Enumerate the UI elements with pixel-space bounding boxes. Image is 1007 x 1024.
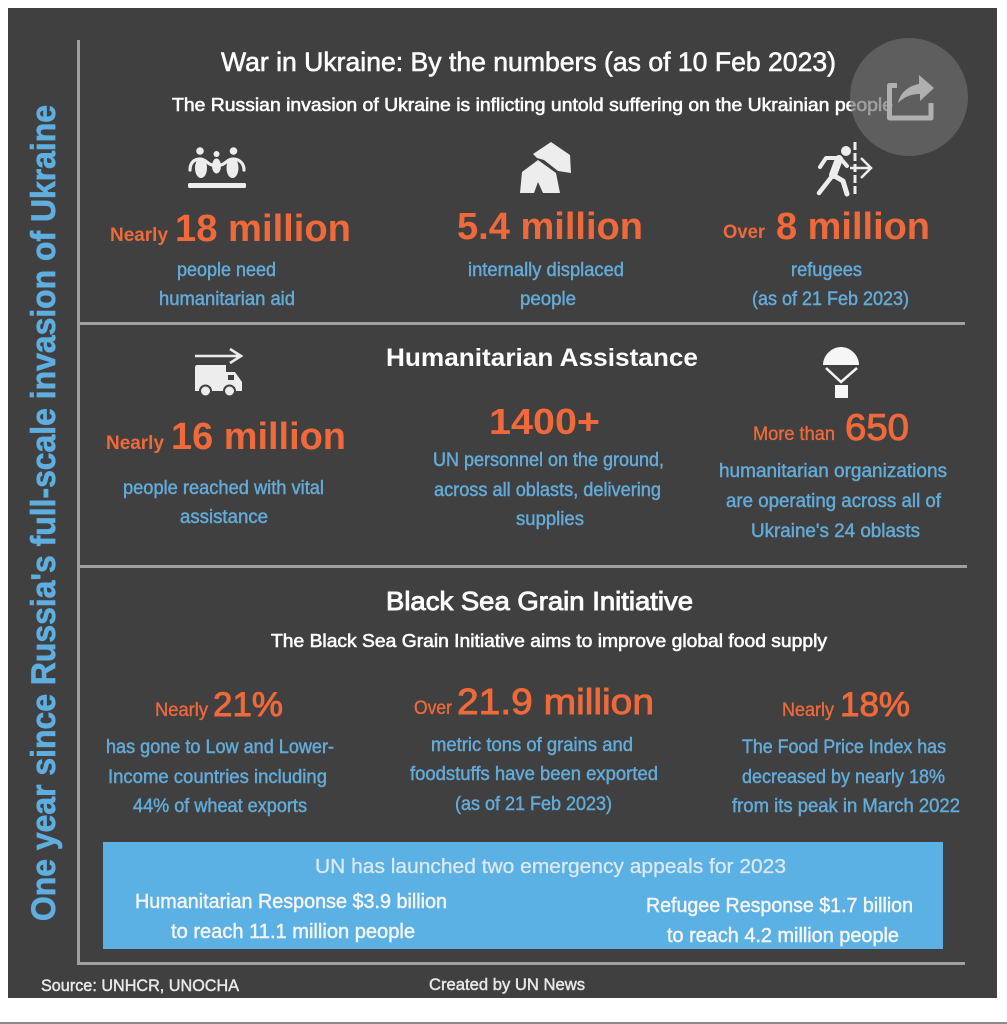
stat: 16 million: assistance [180, 507, 268, 528]
stat: 650 organizations: 650 [845, 407, 909, 448]
stat: 5.4 million: people [520, 289, 576, 310]
stat: 18 million: Nearly [110, 225, 168, 246]
subheading: The Black Sea Grain Initiative aims to improve global food supply [271, 630, 828, 651]
stat: 18%: from its peak in March 2022 [732, 796, 960, 817]
stat: 18 million [110, 208, 351, 310]
stat: 8 million [723, 206, 930, 310]
callout: emergency appeals: to reach 4.2 million people [667, 924, 899, 947]
stat: 1400+: 1400+ [489, 401, 600, 442]
credit note: Created by UN News [429, 975, 585, 994]
panel: black sea grain initiative [106, 586, 960, 817]
stat: 16 million: people reached with vital [123, 478, 324, 499]
stat: 18%: decreased by nearly 18% [742, 767, 945, 788]
icon: delivery truck [195, 349, 242, 396]
stat: 5.4 million: internally displaced [468, 260, 624, 281]
stat: 5.4 million: 5.4 million [457, 206, 643, 248]
stat: 21.9 million: (as of 21 Feb 2023) [455, 794, 612, 815]
callout: emergency appeals [103, 842, 943, 949]
stat: 18 million: humanitarian aid [159, 289, 295, 310]
stat: 1400+ [433, 401, 664, 530]
heading: Humanitarian Assistance [386, 344, 698, 372]
stat: 21%: Income countries including [108, 767, 327, 788]
stat: 16 million [106, 416, 346, 528]
stat: 18 million: 18 million [175, 208, 351, 250]
stat: 650 organizations: More than [753, 424, 835, 445]
stat: 21.9 million: metric tons of grains and [431, 735, 633, 756]
stat: 21%: Nearly [155, 700, 208, 721]
stat: 21%: 21% [213, 686, 283, 724]
icon: refugee crossing border [819, 142, 871, 195]
stat: 21.9 million: 21.9 million [457, 681, 654, 722]
stat: 1400+: supplies [516, 509, 584, 530]
callout: emergency appeals: UN has launched two emergency appeals for 2023 [315, 855, 786, 878]
callout: emergency appeals: to reach 11.1 million people [171, 920, 415, 943]
source note: Source: UNHCR, UNOCHA [41, 976, 240, 995]
icon: displaced housing [520, 142, 571, 193]
stat: 21%: has gone to Low and Lower- [106, 737, 334, 758]
stat: 18%: The Food Price Index has [742, 737, 946, 758]
stat: 21.9 million: Over [414, 698, 453, 719]
stat: 650 organizations [719, 407, 947, 542]
stat: 1400+: across all oblasts, delivering [434, 480, 661, 501]
stat: 16 million: Nearly [106, 433, 164, 454]
stat: 21% [106, 686, 334, 817]
stat: 8 million: Over [723, 222, 766, 243]
stat: 21%: 44% of wheat exports [133, 796, 307, 817]
stat: 8 million: refugees [791, 260, 862, 281]
stat: 18 million: people need [177, 260, 276, 281]
vertical side title: One year since Russia's full-scale invasion of Ukraine [25, 105, 63, 921]
stat: 8 million: 8 million [776, 206, 930, 248]
stat: 18% [732, 686, 960, 817]
callout: emergency appeals: Humanitarian Response $3.9 billion [135, 890, 447, 913]
stat: 21.9 million: foodstuffs have been exported [410, 764, 658, 785]
panel: war in numbers [110, 47, 930, 310]
panel: humanitarian assistance [106, 344, 947, 542]
stat: 5.4 million [457, 206, 643, 310]
stat: 16 million: 16 million [171, 416, 346, 458]
stat: 18%: Nearly [782, 700, 834, 721]
stat: 1400+: UN personnel on the ground, [433, 450, 664, 471]
icon: family [188, 147, 246, 188]
subtitle: The Russian invasion of Ukraine is inflicting untold suffering on the Ukrainian people [172, 94, 893, 115]
stat: 8 million: (as of 21 Feb 2023) [752, 289, 909, 310]
icon: parachute drop [823, 347, 859, 398]
stat: 650 organizations: are operating across all of [726, 491, 942, 512]
main title: War in Ukraine: By the numbers (as of 10 Feb 2023) [221, 47, 836, 77]
icon: share button [850, 38, 968, 156]
stat: 18%: 18% [840, 686, 910, 724]
stat: 650 organizations: Ukraine's 24 oblasts [751, 521, 920, 542]
heading: Black Sea Grain Initiative [386, 586, 693, 616]
stat: 650 organizations: humanitarian organizations [719, 461, 947, 482]
callout: emergency appeals: Refugee Response $1.7 billion [646, 894, 913, 917]
stat: 21.9 million [410, 681, 658, 815]
